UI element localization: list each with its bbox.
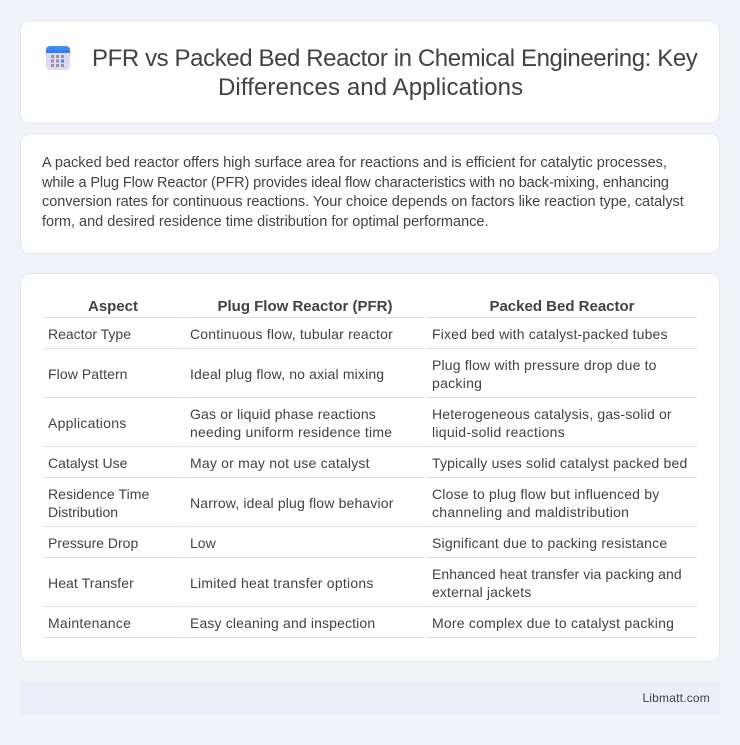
row: Applications: Applications [48, 415, 126, 431]
row: Heat Transfer: Heat Transfer [48, 575, 134, 591]
title: Differences and Applications [218, 74, 523, 101]
row: Pressure Drop [48, 535, 667, 551]
row: Flow Pattern: Ideal plug flow, no axial mixing [190, 366, 384, 382]
intro text [42, 155, 684, 230]
row: Residence Time Distribution: Residence Time [48, 486, 149, 502]
intro text: A packed bed reactor offers high surface area for reactions and is efficient for catalytic processes, [42, 155, 667, 171]
row: Applications: Heterogeneous catalysis, gas-solid or [432, 406, 672, 422]
title: PFR vs Packed Bed Reactor in Chemical Engineering: Key [92, 45, 697, 72]
row: Maintenance: Easy cleaning and inspection [190, 615, 375, 631]
row: Applications: needing uniform residence time [190, 424, 392, 440]
row: Flow Pattern: packing [432, 375, 482, 391]
row: Residence Time Distribution: Distribution [48, 504, 118, 520]
row: Pressure Drop: Low [190, 535, 216, 551]
row: Residence Time Distribution: Close to plug flow but influenced by [432, 486, 659, 502]
header row: Packed Bed Reactor [489, 298, 635, 315]
row: Maintenance: More complex due to catalyst packing [432, 615, 674, 631]
row: Applications [48, 406, 672, 440]
intro text: form, and desired residence time distribution for optimal performance. [42, 214, 488, 230]
row: Flow Pattern: Plug flow with pressure drop due to [432, 357, 657, 373]
row: Catalyst Use: May or may not use catalyst [190, 455, 370, 471]
row: Catalyst Use: Typically uses solid catalyst packed bed [432, 455, 687, 471]
row: Catalyst Use: Catalyst Use [48, 455, 127, 471]
table card [20, 273, 720, 662]
header row [88, 298, 635, 315]
footer credit: Libmatt.com [642, 691, 710, 705]
header row: Plug Flow Reactor (PFR) [217, 298, 392, 315]
header row: Aspect [88, 298, 138, 315]
row: Reactor Type: Continuous flow, tubular reactor [190, 326, 393, 342]
title [92, 45, 698, 101]
row: Reactor Type: Reactor Type [48, 326, 131, 342]
footer [20, 681, 720, 715]
row: Catalyst Use [48, 455, 687, 471]
row: Reactor Type: Fixed bed with catalyst-packed tubes [432, 326, 668, 342]
icon: calendar [46, 46, 70, 70]
row: Flow Pattern [48, 357, 657, 391]
row: Heat Transfer: external jackets [432, 584, 531, 600]
row: Residence Time Distribution [48, 486, 660, 520]
row: Heat Transfer [48, 566, 682, 600]
intro text: while a Plug Flow Reactor (PFR) provides ideal flow characteristics with no back-mixing, enhancing [42, 175, 669, 191]
row: Heat Transfer: Limited heat transfer options [190, 575, 374, 591]
intro text: conversion rates for continuous reactions. Your choice depends on factors like reaction type, catalyst [42, 194, 684, 210]
row: Applications: Gas or liquid phase reactions [190, 406, 376, 422]
row: Maintenance: Maintenance [48, 615, 131, 631]
intro card [20, 133, 720, 254]
row: Maintenance [48, 615, 674, 631]
row: Residence Time Distribution: channeling and maldistribution [432, 504, 629, 520]
comparison table [43, 298, 697, 638]
row: Applications: liquid-solid reactions [432, 424, 565, 440]
row: Flow Pattern: Flow Pattern [48, 366, 128, 382]
row: Heat Transfer: Enhanced heat transfer via packing and [432, 566, 682, 582]
row: Residence Time Distribution: Narrow, ideal plug flow behavior [190, 495, 394, 511]
title card [20, 20, 720, 124]
row: Pressure Drop: Significant due to packing resistance [432, 535, 667, 551]
row: Pressure Drop: Pressure Drop [48, 535, 138, 551]
row: Reactor Type [48, 326, 668, 342]
